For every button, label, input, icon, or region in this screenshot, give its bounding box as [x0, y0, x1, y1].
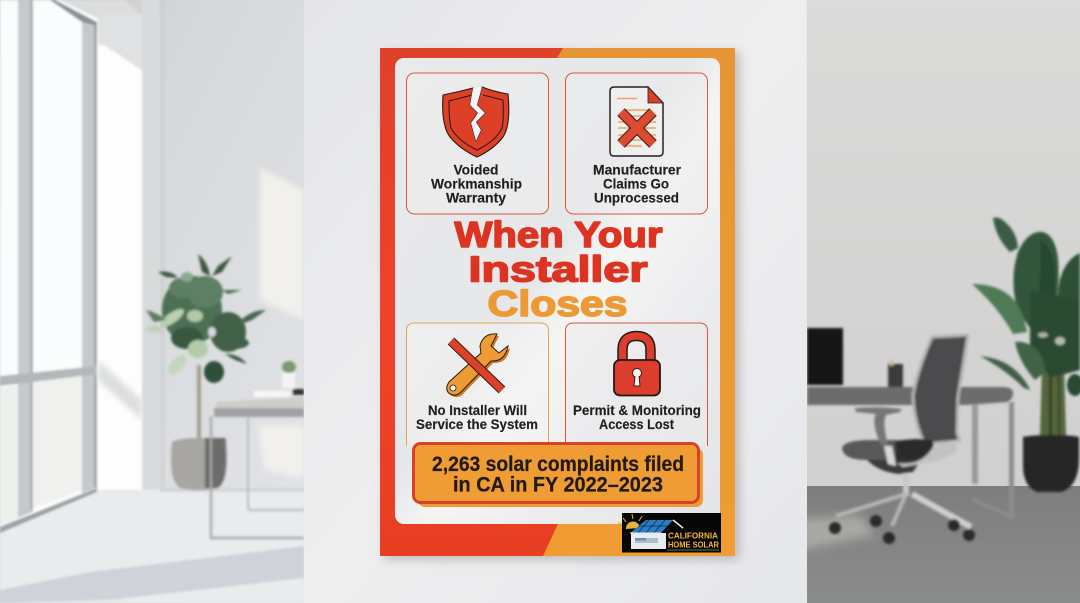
label: [431, 162, 522, 206]
left plant: [146, 254, 266, 490]
label: No Installer Will: [428, 402, 527, 418]
icon: crossed-out wrench: [447, 334, 510, 397]
icon: broken shield: [443, 87, 509, 157]
poster: [380, 48, 740, 560]
card: voided warranty: [406, 73, 548, 214]
office chair: [829, 335, 975, 544]
left desk: [211, 361, 304, 538]
label: Access Lost: [599, 416, 674, 432]
label: [593, 162, 682, 206]
card: permit access: [566, 323, 708, 452]
label: [573, 402, 701, 432]
label: Warranty: [446, 190, 506, 206]
left floor: [0, 488, 304, 603]
logo: California Home Solar: [618, 513, 721, 552]
title: Installer: [468, 248, 648, 290]
icon: sun: [618, 514, 642, 529]
card: no installer: [406, 323, 548, 452]
background: centre wall: [304, 0, 806, 603]
logo: California Home Solar: HOME SOLAR: [668, 540, 719, 550]
right plant: [972, 218, 1080, 492]
poster background: red and orange: [380, 48, 735, 556]
label: Unprocessed: [594, 190, 679, 206]
white panel: [395, 58, 720, 524]
label: [416, 402, 538, 432]
icon: rejected document: [610, 87, 663, 156]
right desk: [807, 328, 1014, 518]
label: Manufacturer: [593, 162, 682, 178]
icon: solar roof house: [630, 520, 719, 550]
callout: complaints banner: 2,263 solar complaints filed: [432, 453, 684, 476]
title: When Your: [454, 214, 662, 255]
title: Closes: [488, 283, 628, 324]
card: manufacturer claims: [566, 73, 708, 214]
title: [454, 214, 662, 324]
label: Voided: [454, 162, 498, 178]
background: right room: [790, 0, 1080, 603]
sun patches: [98, 168, 304, 478]
label: Workmanship: [431, 176, 522, 192]
logo wordmark: CALIFORNIA: [668, 530, 718, 540]
label: Service the System: [416, 416, 538, 432]
callout: complaints banner: in CA in FY 2022–2023: [453, 474, 663, 496]
background: left room: [0, 0, 304, 603]
poster shadow: [384, 52, 740, 560]
label: Claims Go: [603, 176, 669, 192]
window and pillar: [0, 0, 165, 530]
callout: complaints banner: [414, 444, 703, 507]
icon: padlock: [614, 336, 660, 396]
label: Permit & Monitoring: [573, 402, 701, 418]
